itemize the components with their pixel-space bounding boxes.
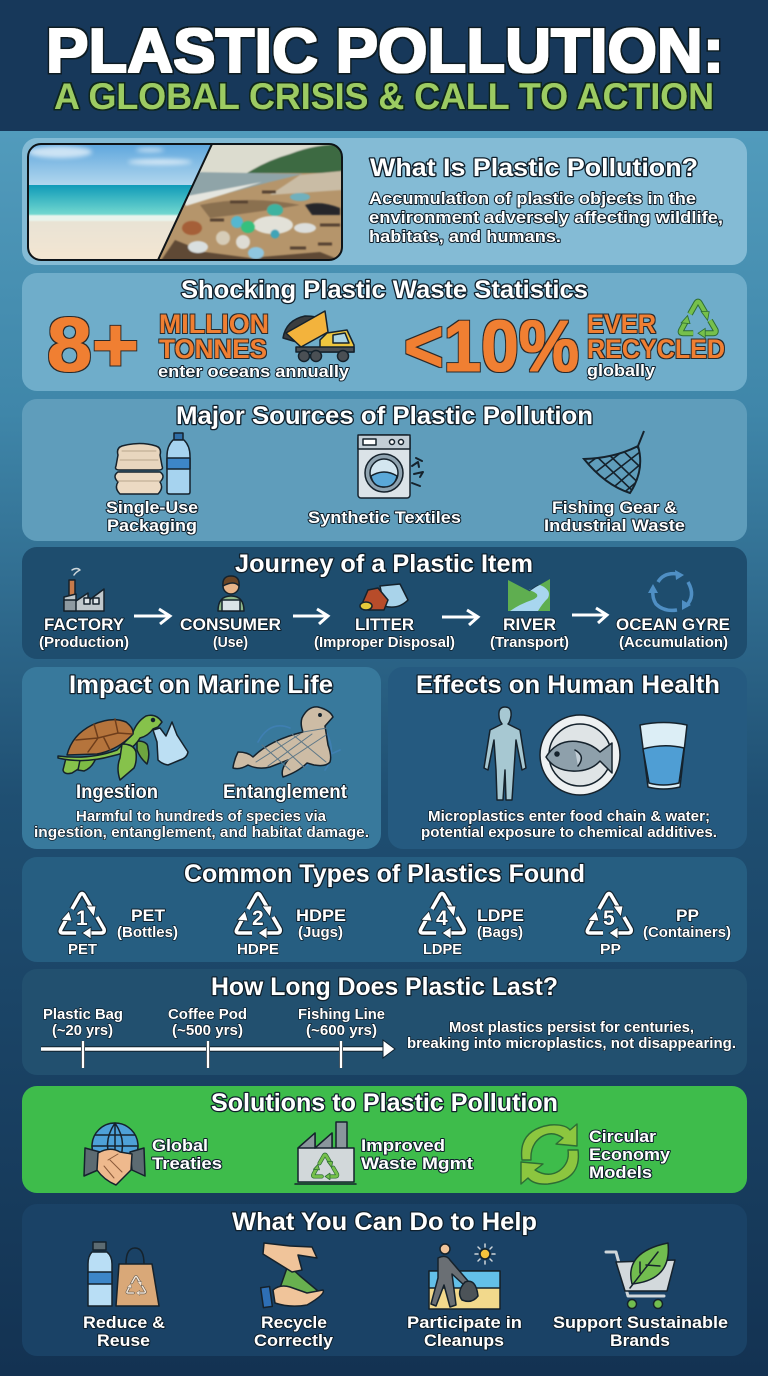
label: Correctly bbox=[254, 1331, 334, 1350]
label: Improved bbox=[361, 1136, 445, 1155]
plastic type 1: 1 bbox=[76, 907, 88, 930]
statistic: under 10 percent recycled: <10% bbox=[404, 307, 579, 387]
arrow bbox=[442, 610, 478, 625]
step: river: (Transport) bbox=[490, 635, 569, 651]
body text bbox=[369, 189, 723, 246]
subtitle: A GLOBAL CRISIS & CALL TO ACTION bbox=[54, 76, 714, 117]
timeline label: fishing line: (~600 yrs) bbox=[306, 1023, 377, 1039]
step: ocean gyre bbox=[616, 615, 730, 651]
icon: fishing net bbox=[582, 430, 645, 494]
icon: factory bbox=[64, 568, 104, 611]
panel: effects on human health bbox=[388, 667, 747, 849]
label: Recycle bbox=[261, 1313, 327, 1332]
label bbox=[589, 1127, 671, 1182]
arrow bbox=[293, 609, 328, 624]
label: Cleanups bbox=[424, 1331, 504, 1350]
description: Microplastics enter food chain & water; bbox=[428, 808, 710, 825]
plastic type 2 bbox=[236, 894, 346, 958]
label: Synthetic Textiles bbox=[308, 508, 461, 527]
label: Packaging bbox=[107, 516, 197, 535]
step: litter: LITTER bbox=[355, 615, 414, 634]
heading: Impact on Marine Life bbox=[69, 671, 333, 699]
timeline label: fishing line bbox=[298, 1007, 385, 1039]
icon: fish on plate bbox=[540, 715, 620, 795]
step: river bbox=[490, 615, 569, 651]
note: breaking into microplastics, not disappearing. bbox=[407, 1036, 736, 1052]
plastic type 4: (Bags) bbox=[477, 925, 523, 941]
label: Reuse bbox=[97, 1331, 150, 1350]
panel: statistics bbox=[22, 273, 747, 391]
label: Economy bbox=[589, 1145, 671, 1164]
label bbox=[152, 1136, 222, 1173]
heading: Effects on Human Health bbox=[416, 671, 720, 699]
body text: Accumulation of plastic objects in the bbox=[369, 189, 696, 208]
panel: major sources bbox=[22, 399, 747, 541]
label bbox=[254, 1313, 334, 1350]
icon: human body bbox=[484, 707, 526, 800]
step: factory bbox=[39, 615, 129, 651]
heading: What You Can Do to Help bbox=[232, 1208, 537, 1236]
label bbox=[361, 1136, 473, 1173]
heading: Solutions to Plastic Pollution bbox=[211, 1089, 558, 1117]
panel: solutions bbox=[22, 1086, 747, 1193]
plastic type 1: PET bbox=[68, 942, 97, 958]
plastic type 1: (Bottles) bbox=[117, 925, 178, 941]
label: Treaties bbox=[152, 1154, 222, 1173]
label: Waste Mgmt bbox=[361, 1154, 473, 1173]
icon: washing machine bbox=[358, 435, 423, 498]
timeline label: plastic bag: (~20 yrs) bbox=[52, 1023, 113, 1039]
icon: hands recycling bbox=[261, 1243, 323, 1308]
heading: Common Types of Plastics Found bbox=[184, 860, 585, 888]
icon: seal in net bbox=[233, 707, 340, 777]
icon: river bbox=[508, 579, 550, 611]
label: Brands bbox=[610, 1331, 670, 1350]
icon: reusable bottle and bag bbox=[88, 1242, 159, 1306]
label: Global bbox=[152, 1136, 208, 1155]
timeline label: plastic bag: Plastic Bag bbox=[43, 1007, 123, 1023]
panel: common types of plastics bbox=[22, 857, 747, 962]
description bbox=[34, 808, 369, 841]
body text: environment adversely affecting wildlife, bbox=[369, 208, 723, 227]
icon: turtle with bag bbox=[58, 715, 188, 780]
label bbox=[553, 1313, 728, 1350]
statistic: under 10 percent recycled: RECYCLED bbox=[587, 334, 725, 364]
label: Fishing Gear & bbox=[552, 498, 677, 517]
step: consumer: CONSUMER bbox=[180, 615, 281, 634]
panel: journey of a plastic item bbox=[22, 547, 747, 659]
plastic type 5: (Containers) bbox=[643, 925, 731, 941]
plastic type 2: 2 bbox=[252, 907, 264, 930]
label: Support Sustainable bbox=[553, 1313, 728, 1332]
label: Ingestion bbox=[76, 782, 158, 803]
description: Harmful to hundreds of species via bbox=[76, 808, 327, 825]
step: consumer bbox=[180, 615, 281, 651]
plastic type 5: PP bbox=[600, 942, 621, 958]
plastic type 2: (Jugs) bbox=[298, 925, 343, 941]
timeline label: coffee pod: (~500 yrs) bbox=[172, 1023, 243, 1039]
panel: what you can do bbox=[22, 1204, 747, 1356]
icon: beach cleanup bbox=[429, 1244, 500, 1309]
timeline label: coffee pod bbox=[168, 1007, 247, 1039]
statistic: under 10 percent recycled: globally bbox=[587, 361, 656, 380]
statistic: under 10 percent recycled bbox=[404, 307, 725, 387]
note: Most plastics persist for centuries, bbox=[449, 1020, 694, 1036]
heading: Journey of a Plastic Item bbox=[235, 550, 533, 578]
plastic type 4: LDPE bbox=[477, 906, 524, 925]
step: consumer: (Use) bbox=[213, 635, 248, 651]
step: ocean gyre: OCEAN GYRE bbox=[616, 615, 730, 634]
label: Participate in bbox=[407, 1313, 522, 1332]
heading: How Long Does Plastic Last? bbox=[211, 973, 558, 1001]
arrow bbox=[572, 608, 607, 623]
icon: consumer bbox=[218, 576, 244, 611]
heading: What Is Plastic Pollution? bbox=[370, 154, 698, 182]
icon: shopping cart with leaf bbox=[606, 1243, 675, 1308]
description: potential exposure to chemical additives. bbox=[421, 824, 717, 841]
label: Entanglement bbox=[223, 782, 348, 803]
statistic: 8+ million tonnes: enter oceans annually bbox=[158, 362, 350, 381]
plastic type 5: PP bbox=[676, 906, 699, 925]
statistic: 8+ million tonnes: MILLION bbox=[159, 309, 269, 339]
timeline bbox=[41, 1040, 395, 1068]
step: factory: (Production) bbox=[39, 635, 129, 651]
icon: water glass bbox=[640, 722, 687, 789]
statistic: 8+ million tonnes: 8+ bbox=[47, 303, 139, 388]
icon: ocean gyre bbox=[648, 570, 692, 610]
photo: clean beach versus polluted beach bbox=[28, 144, 350, 262]
timeline label: plastic bag bbox=[43, 1007, 123, 1039]
step: ocean gyre: (Accumulation) bbox=[619, 635, 728, 651]
label: Reduce & bbox=[83, 1313, 165, 1332]
label: Industrial Waste bbox=[544, 516, 685, 535]
plastic type 4 bbox=[420, 894, 524, 958]
label: Models bbox=[589, 1163, 652, 1182]
timeline label: fishing line: Fishing Line bbox=[298, 1007, 385, 1023]
step: factory: FACTORY bbox=[44, 615, 125, 634]
plastic type 1 bbox=[60, 894, 178, 958]
plastic type 5: 5 bbox=[603, 907, 615, 930]
label bbox=[407, 1313, 522, 1350]
label bbox=[83, 1313, 165, 1350]
icon: globe and handshake bbox=[84, 1123, 145, 1185]
header band bbox=[0, 0, 768, 131]
plastic type 5 bbox=[587, 894, 731, 958]
note bbox=[407, 1020, 736, 1052]
plastic type 1: PET bbox=[131, 906, 166, 925]
arrow bbox=[134, 609, 170, 624]
icon: recycling facility bbox=[295, 1122, 356, 1184]
panel: impact on marine life bbox=[22, 667, 381, 849]
panel: what is plastic pollution bbox=[22, 138, 747, 265]
label: Single-Use bbox=[106, 498, 198, 517]
statistic: 8+ million tonnes bbox=[47, 303, 350, 388]
step: litter: (Improper Disposal) bbox=[314, 635, 455, 651]
heading: Shocking Plastic Waste Statistics bbox=[181, 276, 588, 304]
step: litter bbox=[314, 615, 455, 651]
heading: Major Sources of Plastic Pollution bbox=[176, 402, 593, 430]
panel: how long does plastic last bbox=[22, 969, 747, 1075]
icon: circular economy arrows bbox=[521, 1124, 578, 1184]
plastic type 4: LDPE bbox=[423, 942, 462, 958]
icon: foam box and bottle bbox=[115, 433, 190, 494]
icon: litter bbox=[360, 584, 408, 610]
plastic type 4: 4 bbox=[436, 907, 448, 930]
description: ingestion, entanglement, and habitat damage. bbox=[34, 824, 369, 841]
step: river: RIVER bbox=[503, 615, 556, 634]
icon: dump truck bbox=[283, 311, 354, 362]
plastic type 2: HDPE bbox=[296, 906, 346, 925]
main title: PLASTIC POLLUTION: bbox=[46, 17, 724, 86]
timeline label: coffee pod: Coffee Pod bbox=[168, 1007, 247, 1023]
statistic: under 10 percent recycled: EVER bbox=[587, 309, 656, 339]
body text: habitats, and humans. bbox=[369, 227, 561, 246]
label: Circular bbox=[589, 1127, 656, 1146]
description bbox=[421, 808, 717, 841]
icon: recycle symbol bbox=[681, 302, 716, 338]
statistic: 8+ million tonnes: TONNES bbox=[159, 334, 267, 364]
plastic type 2: HDPE bbox=[237, 942, 279, 958]
